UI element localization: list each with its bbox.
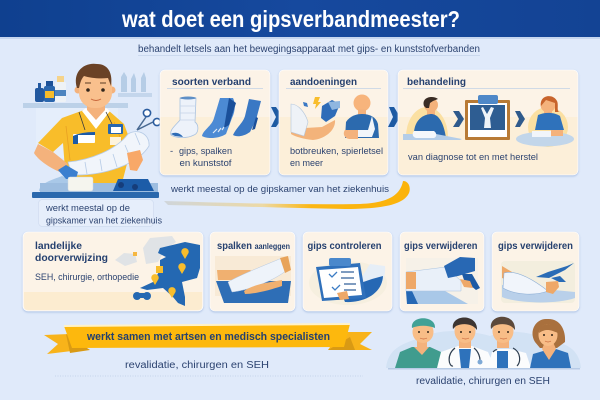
panel: gips verwijderen 2 <box>492 232 579 311</box>
icon: patient in bed <box>403 97 462 140</box>
heading: behandeling <box>407 76 466 88</box>
caption: gipskamer <box>38 200 162 226</box>
arrow: soorten naar aandoeningen <box>271 107 283 127</box>
table top <box>40 183 158 192</box>
backdrop <box>386 331 581 368</box>
heading: gips verwijderen <box>404 240 478 252</box>
person: verpleegkundige <box>530 319 571 368</box>
lanyards and badges <box>79 112 113 130</box>
text: botbreuken, spierletsel <box>290 146 383 157</box>
heading: gips controleren <box>308 240 382 252</box>
arrow small 2 <box>515 111 525 127</box>
text: SEH, chirurgie, orthopedie <box>35 272 139 283</box>
panel: soorten verband <box>160 70 270 175</box>
icon: recovering patient <box>516 96 574 147</box>
icon: cast cutter <box>501 261 575 303</box>
table <box>32 192 159 198</box>
heading: aandoeningen <box>290 76 357 88</box>
panel: soorten verband: gips, spalken <box>179 146 232 157</box>
arrow small 1 <box>453 111 464 127</box>
blue gloved hand <box>58 165 78 179</box>
torso <box>38 110 130 183</box>
panel: soorten verband: en kunststof <box>180 158 232 169</box>
panel: landelijke doorverwijzing: doorverwijzing <box>35 252 108 264</box>
title: wat doet een gipsverbandmeester? <box>121 6 460 32</box>
person: arts 2 <box>488 317 531 368</box>
heading: gips verwijderen <box>498 240 573 252</box>
left arm <box>34 144 68 172</box>
map: Nederland <box>115 236 200 306</box>
ribbon tail right <box>328 332 372 350</box>
neck and head <box>87 100 105 120</box>
banner <box>44 323 372 354</box>
shelves with bottles <box>23 72 152 158</box>
person: chirurg <box>395 318 441 368</box>
heading: landelijke <box>35 240 82 252</box>
icon: cast boot <box>171 96 198 138</box>
panel: aandoeningen <box>279 70 388 175</box>
illustration: gipsverbandmeester <box>23 64 161 198</box>
text: revalidatie links: revalidatie, chirurgen en SEH <box>125 360 269 371</box>
bandaged arm <box>68 132 149 175</box>
ribbon body <box>64 324 350 348</box>
panel: aandoeningen: en meer <box>290 158 323 169</box>
panel: gips verwijderen 1 <box>400 232 484 311</box>
icon: x-ray clipboard <box>465 95 510 140</box>
bandage rolls <box>68 177 93 191</box>
icon: blue brace <box>233 99 261 136</box>
ribbon text: werkt samen met artsen en medisch specialisten <box>86 331 330 343</box>
caption: gipskamer: gipskamer van het ziekenhuis <box>46 216 162 226</box>
panel: spalken aanleggen <box>210 232 295 311</box>
dotted divider <box>55 375 363 377</box>
heading: spalken aanleggen <box>217 240 290 252</box>
panel: behandeling <box>398 70 578 175</box>
icon: arm fracture <box>291 97 340 140</box>
blue device <box>113 179 154 191</box>
icon: patient with sling <box>344 94 379 139</box>
icon: clipboard with checklist <box>309 258 387 305</box>
swoosh <box>164 181 410 209</box>
text: - <box>170 146 173 157</box>
header band <box>0 0 600 39</box>
text: van diagnose tot en met herstel <box>408 152 538 163</box>
subtitle: behandelt letsels aan het bewegingsapparaat met gips- en kunststofverbanden <box>138 44 480 55</box>
text: werkt meestal: werkt meestal op de gipskamer van het ziekenhuis <box>170 184 389 195</box>
panel: gips controleren <box>303 232 392 311</box>
icon: splint applied <box>215 256 291 303</box>
bandaged forearm on table <box>39 176 70 191</box>
ribbon tail left <box>44 334 80 354</box>
heading: soorten verband <box>172 76 251 88</box>
icon: blue splint <box>202 98 236 138</box>
panel: landelijke doorverwijzing <box>23 232 203 311</box>
text: revalidatie team: revalidatie, chirurgen en SEH <box>416 376 550 387</box>
illustration: team van artsen <box>386 317 581 370</box>
person: arts 1 <box>437 318 495 368</box>
right hand <box>127 150 143 171</box>
icon: cast saw <box>406 257 480 304</box>
caption: gipskamer: werkt meestal op de <box>45 203 130 213</box>
arrow: aandoeningen naar behandeling <box>388 107 400 127</box>
scissors <box>137 117 153 130</box>
